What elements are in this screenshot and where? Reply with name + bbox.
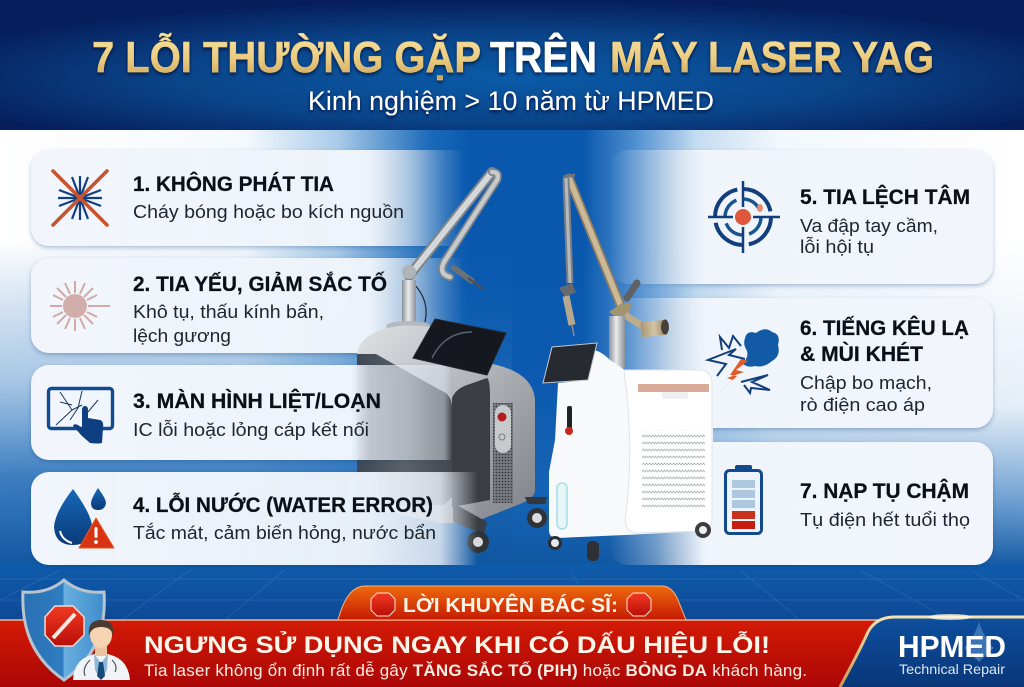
- title: MÁY LASER YAG: [610, 32, 934, 82]
- warning detail: Tia laser không ổn định rất dễ gây TĂNG SẮC TỐ (PIH) hoặc BỎNG DA khách hàng.: [144, 660, 807, 680]
- card 1: [31, 150, 501, 246]
- card 6: Chập bo mạch,: [800, 373, 932, 393]
- red button: [495, 405, 511, 453]
- card 4: Tắc mát, cảm biến hỏng, nước bẩn: [133, 522, 436, 543]
- cabinet: [549, 350, 713, 538]
- touch screen of grey machine: [413, 319, 506, 375]
- switch: [565, 406, 573, 435]
- front panel: [624, 370, 712, 533]
- header band: [0, 0, 1024, 130]
- card 2: 2. TIA YẾU, GIẢM SẮC TỐ: [133, 270, 387, 296]
- icon: short circuit smoke: [708, 329, 779, 395]
- laser machine: white: [543, 175, 713, 561]
- card 4: 4. LỖI NƯỚC (WATER ERROR): [133, 491, 433, 517]
- icon: laser off: [53, 171, 107, 225]
- LED strip: [557, 483, 567, 529]
- card 5: lỗi hội tụ: [800, 236, 874, 257]
- card 6: rò điện cao áp: [800, 395, 925, 415]
- brand tagline: Technical Repair: [899, 661, 1005, 677]
- headline warning: NGƯNG SỬ DỤNG NGAY KHI CÓ DẤU HIỆU LỖI!: [144, 630, 770, 659]
- card 6: [610, 298, 993, 428]
- card 5: [610, 150, 993, 284]
- shield with stop sign: [23, 580, 104, 680]
- title: TRÊN: [490, 32, 597, 82]
- tab: doctor's advice: [338, 586, 686, 620]
- side strip: [452, 378, 490, 507]
- base and wheels: [453, 497, 547, 553]
- card 2: lệch gương: [133, 326, 231, 346]
- icon: weak beam: [50, 281, 110, 331]
- icon: water drops with warning: [54, 488, 114, 548]
- card 4: [31, 472, 501, 565]
- card 2: [31, 258, 501, 353]
- card 7: 7. NẠP TỤ CHẬM: [800, 478, 969, 503]
- card 5: Va đập tay cầm,: [800, 216, 938, 236]
- card 5: 5. TIA LỆCH TÂM: [800, 184, 970, 209]
- rose strip: [638, 384, 709, 399]
- main background: [0, 130, 1024, 630]
- touch screen: [543, 343, 597, 383]
- right cards: [610, 150, 993, 565]
- brand name: HPMED: [898, 629, 1006, 664]
- card 3: 3. MÀN HÌNH LIỆT/LOẠN: [133, 388, 381, 413]
- title: 7 LỖI THƯỜNG GẶP: [92, 31, 481, 82]
- brand logo panel: [840, 614, 1024, 687]
- card 1: 1. KHÔNG PHÁT TIA: [133, 171, 334, 196]
- doctor: [73, 620, 130, 680]
- front panel: [357, 354, 452, 505]
- tab: doctor's advice: LỜI KHUYÊN BÁC SĨ:: [403, 593, 618, 617]
- card 3: [31, 365, 501, 460]
- arm: [386, 172, 498, 331]
- icon: stop sign right: [627, 593, 651, 616]
- card 6: & MÙI KHÉT: [800, 341, 923, 366]
- card 7: [610, 442, 993, 565]
- vent panel: [493, 403, 513, 503]
- warning band: [0, 586, 1024, 687]
- shell: [357, 325, 535, 523]
- icon: off-center target: [708, 181, 780, 253]
- laser machine: dark grey: [357, 172, 547, 553]
- title: [92, 31, 934, 82]
- card 2: Khô tụ, thấu kính bẩn,: [133, 302, 324, 322]
- wheels: [548, 522, 711, 561]
- icon: low battery: [726, 465, 762, 534]
- card 7: Tụ điện hết tuổi thọ: [800, 510, 970, 530]
- grille: [642, 430, 705, 510]
- icon: cracked touch screen: [48, 388, 112, 444]
- articulated arm: [559, 175, 669, 368]
- icon: stop sign left: [371, 593, 395, 616]
- card 6: 6. TIẾNG KÊU LẠ: [800, 315, 969, 340]
- card 1: Cháy bóng hoặc bo kích nguồn: [133, 202, 404, 222]
- subtitle: Kinh nghiệm > 10 năm từ HPMED: [308, 86, 714, 116]
- card 3: IC lỗi hoặc lỏng cáp kết nối: [133, 419, 369, 440]
